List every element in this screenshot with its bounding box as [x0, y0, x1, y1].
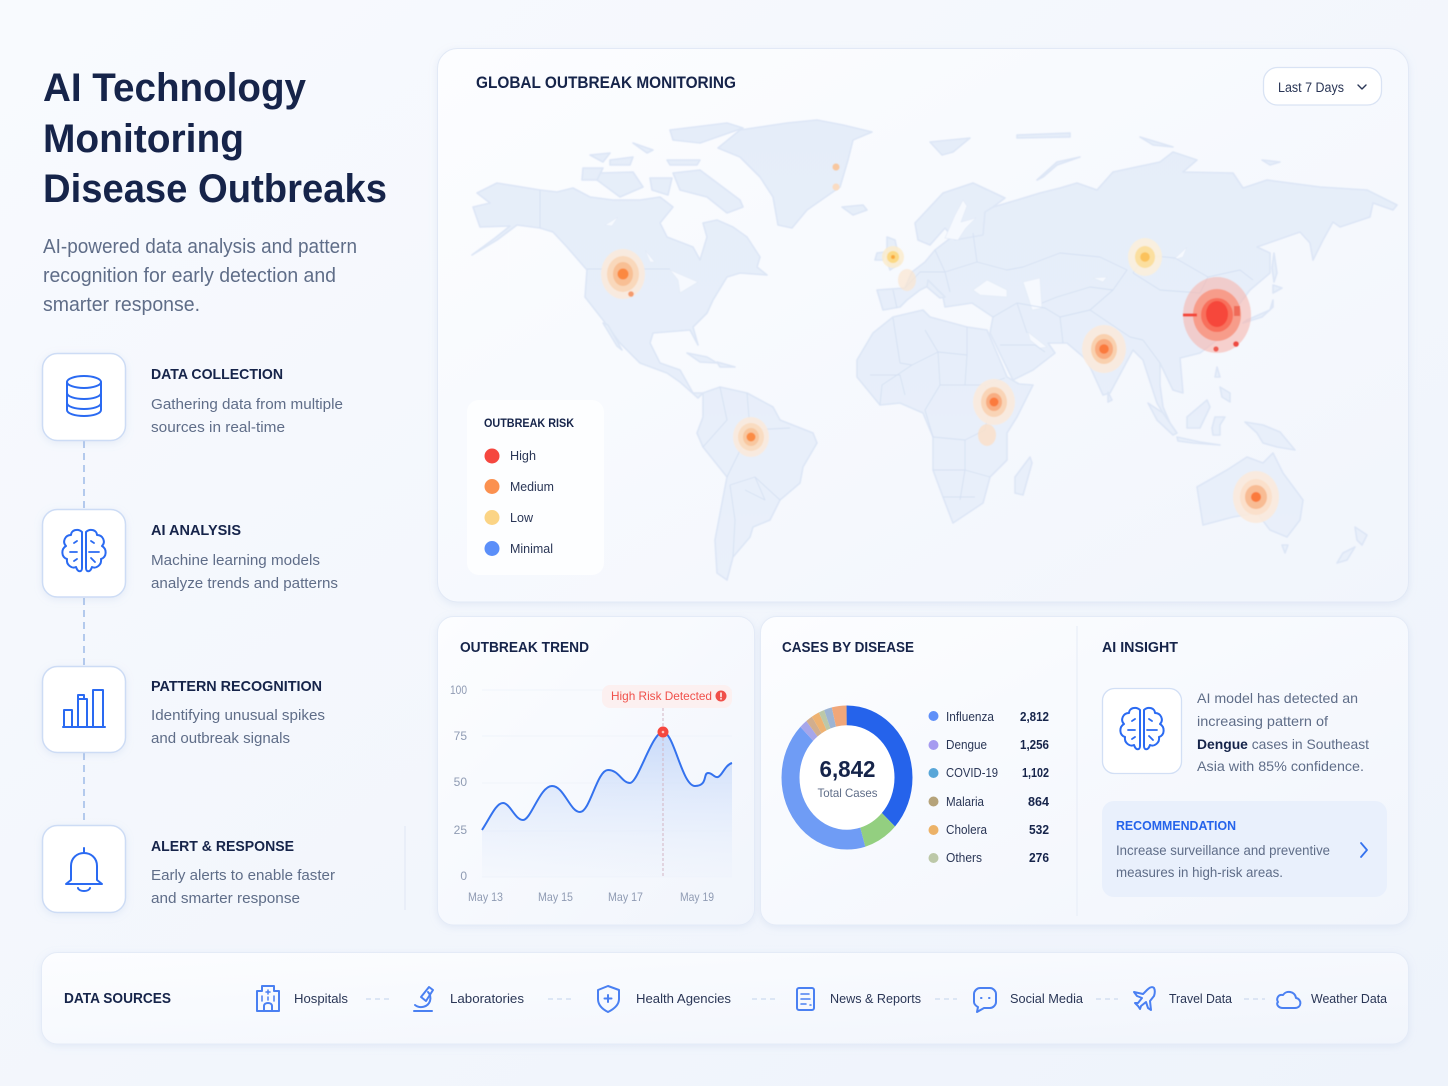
- line chart: May 15: [538, 890, 573, 904]
- donut legend: Others: [946, 851, 982, 865]
- icon: insight brain: [1102, 688, 1182, 774]
- description: ai analysis: [151, 552, 338, 592]
- heading: pattern recognition: PATTERN RECOGNITION: [151, 678, 322, 695]
- icon: brain: [42, 510, 126, 597]
- line chart: [450, 683, 732, 904]
- subtitle: [43, 236, 357, 316]
- line chart: 50: [454, 775, 467, 789]
- title: AI Technology: [43, 66, 307, 110]
- column edge shading: [404, 826, 406, 910]
- source: social media: [974, 988, 1084, 1012]
- donut total: Total Cases: [818, 786, 878, 800]
- line chart: May 17: [608, 890, 643, 904]
- insight text: Dengue cases in Southeast: [1197, 736, 1369, 752]
- source: hospitals: [257, 986, 349, 1011]
- insight text: AI model has detected an: [1197, 690, 1358, 706]
- subtitle: smarter response.: [43, 294, 200, 316]
- subtitle: AI-powered data analysis and pattern: [43, 236, 357, 258]
- source: laboratories: [414, 987, 524, 1011]
- step: pattern recognition: [42, 666, 325, 752]
- legend: outbreak risk: Minimal: [510, 542, 553, 556]
- process connector lines: [83, 441, 85, 824]
- description: ai analysis: Machine learning models: [151, 552, 320, 569]
- panel: outbreak trend: [438, 616, 754, 925]
- hotspot: tanzania: [978, 424, 996, 446]
- peak marker: [658, 726, 668, 738]
- legend: outbreak risk: High: [510, 449, 536, 463]
- donut legend: 276: [1029, 851, 1049, 865]
- line chart: 0: [460, 869, 467, 883]
- hotspot: north america: [601, 249, 645, 299]
- donut legend: Malaria: [946, 795, 984, 809]
- description: pattern recognition: and outbreak signals: [151, 730, 290, 747]
- source: laboratories: Laboratories: [450, 991, 524, 1006]
- recommendation box: [1102, 801, 1387, 897]
- hotspot: greenland: [832, 164, 840, 190]
- world map: [472, 120, 1397, 580]
- source: weather data: [1277, 991, 1388, 1008]
- icon: bar chart: [42, 666, 126, 752]
- title: Disease Outbreaks: [43, 167, 387, 211]
- recommendation box: RECOMMENDATION: [1116, 818, 1236, 833]
- hotspot: south america: [733, 417, 769, 457]
- legend: outbreak risk: Medium: [510, 480, 554, 494]
- description: ai analysis: analyze trends and patterns: [151, 575, 338, 592]
- callout: high risk detected: [602, 685, 732, 708]
- icon: database: [42, 354, 126, 440]
- heading: ai insight: AI INSIGHT: [1102, 640, 1178, 656]
- hotspot: central asia: [1128, 238, 1162, 276]
- donut legend: Influenza: [946, 710, 994, 724]
- line chart: 25: [454, 823, 467, 837]
- description: data collection: sources in real-time: [151, 419, 285, 436]
- step: alert and response: [42, 826, 335, 912]
- hotspot: east africa: [973, 379, 1015, 425]
- heading: global outbreak monitoring: GLOBAL OUTBREAK MONITORING: [476, 74, 736, 92]
- source: travel data: [1134, 987, 1233, 1010]
- subtitle: recognition for early detection and: [43, 265, 336, 287]
- heading: alert and response: ALERT & RESPONSE: [151, 838, 294, 855]
- source: social media: Social Media: [1010, 991, 1084, 1006]
- dropdown: last 7 days: [1264, 68, 1382, 105]
- donut legend: 864: [1028, 795, 1049, 809]
- title: [43, 66, 387, 211]
- description: alert and response: and smarter response: [151, 890, 300, 907]
- description: alert and response: [151, 867, 335, 907]
- icon: chevron: [1361, 843, 1367, 857]
- hotspot: france: [898, 269, 916, 291]
- heading: outbreak trend: OUTBREAK TREND: [460, 640, 589, 656]
- icon: bell: [42, 826, 126, 912]
- donut legend: [928, 710, 1049, 865]
- hotspot: uk: [882, 246, 904, 268]
- donut legend: 1,102: [1022, 766, 1049, 780]
- callout: high risk detected: High Risk Detected: [611, 689, 712, 703]
- donut chart: [790, 715, 904, 840]
- donut legend: COVID-19: [946, 766, 998, 780]
- dropdown: last 7 days: Last 7 Days: [1278, 80, 1344, 95]
- heading: data sources: DATA SOURCES: [64, 991, 171, 1007]
- donut total: [818, 756, 878, 800]
- donut legend: 1,256: [1020, 738, 1049, 752]
- heading: ai analysis: AI ANALYSIS: [151, 522, 241, 539]
- hotspot: india: [1082, 325, 1126, 373]
- source: weather data: Weather Data: [1311, 991, 1388, 1006]
- legend: outbreak risk: [467, 400, 604, 575]
- line chart: 100: [450, 683, 467, 697]
- insight text: Asia with 85% confidence.: [1197, 758, 1364, 774]
- insight text: increasing pattern of: [1197, 713, 1328, 729]
- recommendation box: Increase surveillance and preventive: [1116, 843, 1330, 858]
- panel: data sources: [42, 952, 1408, 1044]
- heading: cases by disease: CASES BY DISEASE: [782, 640, 914, 656]
- title: Monitoring: [43, 117, 244, 161]
- source: health agencies: Health Agencies: [636, 991, 732, 1006]
- panel: cases and insight: [760, 616, 1408, 925]
- line chart: 75: [454, 729, 467, 743]
- donut legend: 2,812: [1020, 710, 1049, 724]
- source: health agencies: [598, 986, 732, 1012]
- heading: data collection: DATA COLLECTION: [151, 366, 283, 383]
- source: travel data: Travel Data: [1169, 991, 1233, 1006]
- step: ai analysis: [42, 510, 338, 597]
- donut legend: Dengue: [946, 738, 987, 752]
- description: pattern recognition: [151, 707, 325, 747]
- hotspot: australia: [1233, 471, 1279, 523]
- donut total: 6,842: [820, 756, 876, 782]
- description: alert and response: Early alerts to enable faster: [151, 867, 335, 884]
- step: data collection: [42, 354, 343, 440]
- source: hospitals: Hospitals: [294, 991, 349, 1006]
- description: data collection: [151, 396, 343, 436]
- hotspot: east asia high risk: [1183, 277, 1251, 353]
- source: news and reports: [797, 988, 921, 1010]
- line chart: May 19: [680, 890, 714, 904]
- legend: outbreak risk: Low: [510, 511, 534, 525]
- panel: global outbreak monitoring: [438, 48, 1408, 602]
- description: pattern recognition: Identifying unusual spikes: [151, 707, 325, 724]
- source: news and reports: News & Reports: [830, 991, 921, 1006]
- line chart: May 13: [468, 890, 503, 904]
- recommendation box: measures in high-risk areas.: [1116, 865, 1283, 880]
- donut legend: Cholera: [946, 823, 987, 837]
- insight text: [1197, 690, 1369, 774]
- donut legend: 532: [1029, 823, 1049, 837]
- legend: outbreak risk: OUTBREAK RISK: [484, 416, 574, 430]
- description: data collection: Gathering data from multiple: [151, 396, 343, 413]
